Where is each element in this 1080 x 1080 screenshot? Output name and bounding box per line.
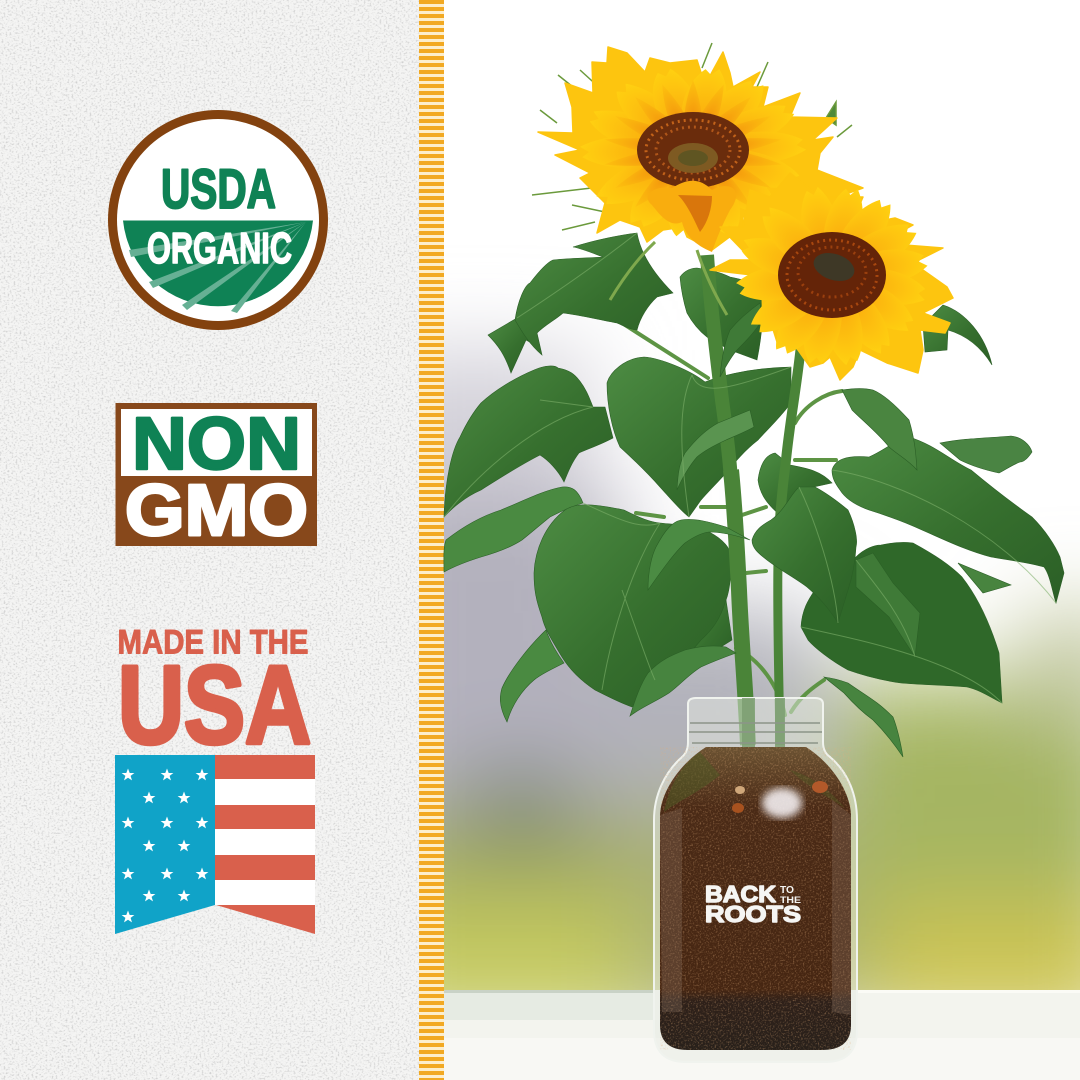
leaf: behind centre right xyxy=(758,453,832,515)
petal silhouette xyxy=(710,173,953,380)
leaf: lower left large xyxy=(534,505,731,707)
USA text: USA xyxy=(118,644,311,767)
front bud petals xyxy=(648,181,736,252)
petal silhouette xyxy=(538,47,863,250)
flag ribbon xyxy=(115,755,315,934)
GMO text: GMO xyxy=(125,471,308,551)
stars xyxy=(122,768,208,922)
leaf: behind flower right xyxy=(923,305,992,365)
jar logo: BACK xyxy=(705,881,776,907)
leaf: lower right large xyxy=(801,542,1002,703)
stems in jar xyxy=(742,698,785,748)
glass jar xyxy=(654,698,857,1062)
green sepal spikes xyxy=(532,43,852,230)
outer petals xyxy=(580,66,807,238)
leaf: upper centre xyxy=(680,268,763,360)
leaf: top-left xyxy=(515,233,673,355)
leaf: by jar xyxy=(824,677,903,757)
leaf: centre fold xyxy=(677,410,754,490)
leaf: behind lower left xyxy=(690,600,732,660)
panel: blurred window background xyxy=(444,310,1080,990)
jar logo: THE xyxy=(780,895,801,905)
badge: Made in the USA xyxy=(115,624,315,934)
jar logo: ROOTS xyxy=(705,901,801,927)
leaf: far left narrow xyxy=(444,487,583,572)
flower disk xyxy=(778,232,886,318)
field rays xyxy=(129,222,306,313)
flower disk xyxy=(637,112,749,188)
leaf: fold on lower right xyxy=(856,553,920,657)
orange striped divider xyxy=(419,0,444,1080)
leaf: right pointed xyxy=(958,563,1011,593)
leaf: centre right xyxy=(752,487,857,623)
leaf veins xyxy=(444,233,1056,703)
panel: linen background xyxy=(0,0,420,1080)
USDA heading: USDA xyxy=(161,157,276,220)
stems xyxy=(707,255,801,745)
window sill xyxy=(444,990,1080,1080)
jar logo: TO xyxy=(780,885,794,896)
soil xyxy=(660,747,851,1050)
leaves xyxy=(444,233,1064,722)
petals xyxy=(734,184,930,368)
leaf: back left dark xyxy=(488,318,535,373)
sunflower: large upper xyxy=(532,43,863,252)
sunflower plant xyxy=(444,43,1064,757)
leaf: right large xyxy=(832,437,1064,603)
front leaves xyxy=(630,303,903,757)
jar logo xyxy=(705,881,801,927)
leaf: lower fold xyxy=(648,519,750,590)
badge: Non GMO xyxy=(116,402,317,551)
leaf: far right small xyxy=(940,436,1032,473)
leaf: upper fold narrow xyxy=(720,303,762,377)
leaf: bottom centre small xyxy=(630,646,736,716)
sunflower: small lower xyxy=(710,173,953,380)
made in the text: MADE IN THE xyxy=(118,624,308,662)
leaf: centre large xyxy=(607,357,791,517)
leaf: drooping xyxy=(842,388,917,470)
NON text: NON xyxy=(132,402,301,485)
inner petals xyxy=(603,80,783,224)
leaf: upper left large xyxy=(444,366,613,517)
badge: USDA Organic xyxy=(108,110,328,330)
green field xyxy=(123,220,313,306)
thin stalks behind leaves xyxy=(625,325,842,715)
neck ridges xyxy=(689,723,822,743)
leaf: bottom left small xyxy=(500,630,564,722)
jar glass body xyxy=(654,698,857,1062)
bud stem and sepals xyxy=(610,242,727,315)
ORGANIC heading: ORGANIC xyxy=(147,224,292,273)
